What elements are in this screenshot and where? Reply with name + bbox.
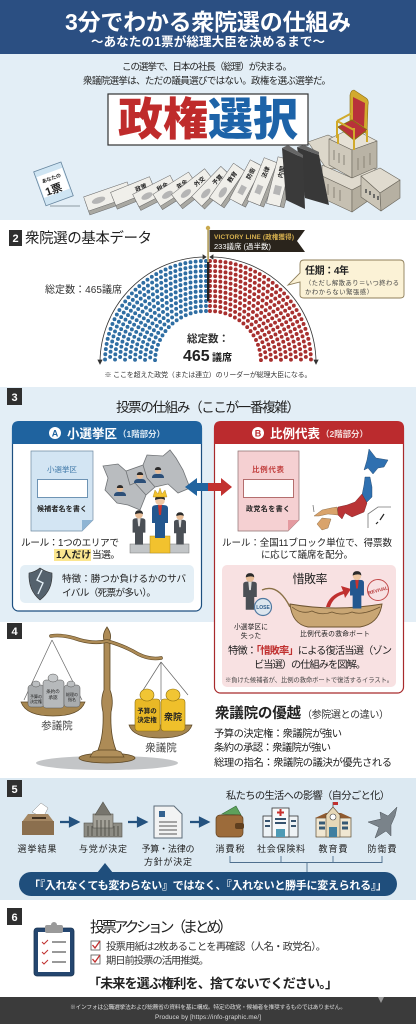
checklist: 投票用紙は2枚あることを再確認（人名・政党名）。 [106,940,326,953]
arrow: revival [326,586,351,607]
panel A header [49,426,165,441]
icon: fighter jet [368,807,397,838]
footer: Produce by [https://info-graphic.me/] [155,1014,261,1021]
boat captions: 失った [241,631,261,640]
illustration: balance scale [21,627,192,770]
dominoes: 外交 [192,175,207,189]
section 4 badge: 4 [11,626,18,638]
text: superiority of lower house: 総理の指名：衆議院の議決が優先される [214,756,392,769]
section 3 badge: 3 [11,392,18,404]
right pan: 衆議院 [129,689,192,738]
panel B header: 比例代表 [270,426,320,441]
heading: 惜敗率: 惜敗率 [292,571,328,586]
callout: term [288,260,404,298]
boat captions [234,622,370,640]
checklist [91,940,326,967]
flow labels: 方針が決定 [144,856,192,867]
ballot: 小選挙区: 小選挙区 [47,464,78,474]
left pan: 参議院: 予算の [30,693,42,699]
rule text B: ルール：全国11ブロック単位で、得票数 [222,537,392,549]
section 2 badge: 2 [12,233,19,245]
left pan: 参議院: 決定権 [30,698,42,704]
boat captions: 小選挙区に [234,622,268,631]
footer: ※インフォは公職選挙法および総務省の資料を基に構成。特定の政党・候補者を推奨するものではありません。 [70,1003,346,1011]
rule text A: 1人だけ [56,549,91,561]
icon: hospital [263,808,298,837]
arrow 2 [128,818,146,826]
callout pill [19,863,397,896]
small note B: ※負けた候補者が、比例の救命ボートで復活するイラスト。 [225,675,393,684]
flow labels: 教育費 [318,843,348,854]
icon: ballot box [22,803,54,835]
illustration: rescue boat [262,588,382,627]
flow labels: 防衛費 [368,843,396,854]
ballot: 比例代表: 政党名を書く [246,504,290,513]
rule text B: に応じて議席を配分。 [261,549,353,561]
label: 参議院: 参議院 [41,719,73,732]
arrow: between systems [185,478,232,496]
text: superiority of lower house: 衆議院の優越 [215,704,302,722]
flow labels [18,843,396,867]
panel A header: （1階部分） [118,429,165,439]
illustration: throne [337,90,368,150]
dominoes: 予算 [210,173,225,187]
label: total seats left: 総定数：465議席 [45,283,122,296]
section 5 background [0,778,416,900]
panel A header: A [52,428,59,438]
dominoes [84,157,296,215]
right pan: 衆議院: 予算の [137,706,157,715]
icon: document [154,806,182,838]
flag: victory line: VICTORY LINE (政権獲得) [214,232,294,241]
icon: vote card: 1票 [44,181,64,199]
panel: hero [0,54,416,220]
panel B header [252,426,368,441]
icon: Japan map [313,449,391,530]
heading: section 2: 衆院選の基本データ [25,229,152,247]
right pan: 衆議院: 衆院 [164,711,182,722]
dominoes: 教育 [226,170,239,184]
flag: victory line [206,226,305,301]
section 4 badge [7,623,22,639]
illustration: Diet building [308,128,400,212]
left pan: 参議院: 指名 [68,696,76,702]
rule text A: 当選。 [92,548,120,561]
icon: clipboard checklist [34,922,74,976]
dominoes: 年金 [175,178,189,191]
flow labels: 社会保険料 [257,843,305,854]
subtitle: 〜あなたの1票が総理大臣を決めるまで〜 [91,34,325,49]
ballot: 比例代表 [238,451,299,531]
left pan: 参議院: 総理の [66,691,78,697]
flow labels: 選挙結果 [18,843,56,854]
flow labels: 消費税 [216,843,244,854]
heading: life impact: 私たちの生活への影響（自分ごと化） [226,789,390,802]
arrow 3 [190,818,208,826]
flow labels: 与党が決定 [79,843,127,854]
label: 衆議院: 衆議院 [145,741,177,754]
intro text [83,61,331,87]
section 6 badge [7,908,22,925]
section 3 badge [7,388,22,405]
footer [0,997,416,1024]
left pan: 参議院: 承認 [48,694,58,701]
feature text B [228,644,392,671]
footnote: ※ ここを超えた政党（または連立）のリーダーが総理大臣になる。 [104,370,312,379]
right pan: 衆議院: 決定権 [137,715,157,724]
dominoes: 内閣 [276,165,287,179]
illustration: winner [350,571,389,609]
text: superiority of lower house: 条約の承認：衆議院が強い [214,741,331,754]
center seats label: 総定数： [187,332,229,345]
intro text: 衆議院選挙は、ただの議員選びではない。政権を選ぶ選挙だ。 [83,75,331,87]
section 2 badge [9,230,22,246]
section 5 badge: 5 [11,784,18,796]
feature text B: ビ当選）の仕組みを図解。 [254,658,366,671]
banner: 政権選択: 政権 [118,94,208,145]
left pan: 参議院 [21,674,85,716]
flow labels: 予算・法律の [142,843,194,854]
callout: term: 任期：4年 [305,264,349,277]
callout: term: （ただし解散あり＝いつ終わる [305,278,399,287]
arrow 1 [60,818,78,826]
panel A: single-seat [12,421,202,611]
bracket lines [230,856,382,873]
center seats label [183,332,232,365]
dominoes: 法律 [260,165,272,179]
center seats label: 465 [183,348,210,365]
panel B header: （2階部分） [321,429,368,439]
chart: hemicycle seats [105,261,311,362]
illustration: loser: LOSE [256,605,270,611]
feature box: 惜敗率 [222,565,396,687]
ballot: 小選挙区: 候補者名を書く [37,504,87,513]
black dominoes [282,145,329,209]
icon: school [315,802,352,837]
rule text A: ルール：1つのエリアで [21,538,119,549]
dominoes: 政権 [110,188,124,199]
feature box A [20,565,194,603]
ballot: 小選挙区 [31,451,93,531]
dominoes: 防衛 [244,167,257,181]
panel B: proportional [214,421,404,693]
dominoes: 政策 [134,182,148,194]
closing message: 「未来を選ぶ権利を、捨てないでください。」 [88,976,338,991]
left pan: 参議院: 条約の [46,688,60,695]
feature box A: イバル（死票が多い）。 [62,586,156,599]
section 6 badge: 6 [11,912,18,924]
dominoes: 税金 [155,181,170,193]
center seats label: 議席 [212,351,232,364]
text: superiority of lower house: （参院選との違い） [302,708,389,721]
checklist: 期日前投票の活用推奨。 [106,954,209,967]
illustration: loser [243,573,272,616]
rule text A [21,538,120,561]
flag: victory line: 233議席 (過半数) [214,241,272,251]
banner: 政権選択: 選択 [208,94,298,145]
panel A header: 小選挙区 [67,426,117,441]
panel B header: B [255,428,262,438]
section 3 background [0,387,416,622]
illustration: winner: REVIVAL [368,585,389,597]
icon: Diet [84,802,122,837]
boat captions: 比例代表の救命ボート [300,629,370,638]
heading: section 6: 投票アクション（まとめ） [90,919,233,936]
callout: term: かわからない緊張感） [305,287,373,296]
title: 3分でわかる衆院選の仕組み [65,9,351,35]
text: superiority of lower house [214,704,392,769]
illustration: podium [130,488,189,553]
icon: vote card [34,162,80,206]
icon: wallet [216,806,244,837]
icon: vote card: あなたの [41,172,62,185]
heading: section 3: 投票の仕組み（ここが一番複雑） [116,399,300,415]
text: superiority of lower house: 予算の決定権：衆議院が強い [214,727,342,740]
callout pill: 「『入れなくても変わらない』ではなく、『入れないと勝手に変えられる』」 [29,878,387,892]
ballot: 比例代表: 比例代表 [252,464,284,474]
banner: 政権選択 [108,94,308,145]
section 5 badge [7,780,22,797]
feature box A: 特徴：勝つか負けるかのサバ [62,572,186,585]
rule text B [222,537,392,561]
feature text B: 特徴：「惜敗率」による復活当選（ゾン [228,644,392,657]
arc arrows [98,255,318,364]
intro text: この選挙で、日本の社長（総理）が決まる。 [122,61,292,73]
header banner [0,0,416,54]
icon: district map [103,450,190,510]
